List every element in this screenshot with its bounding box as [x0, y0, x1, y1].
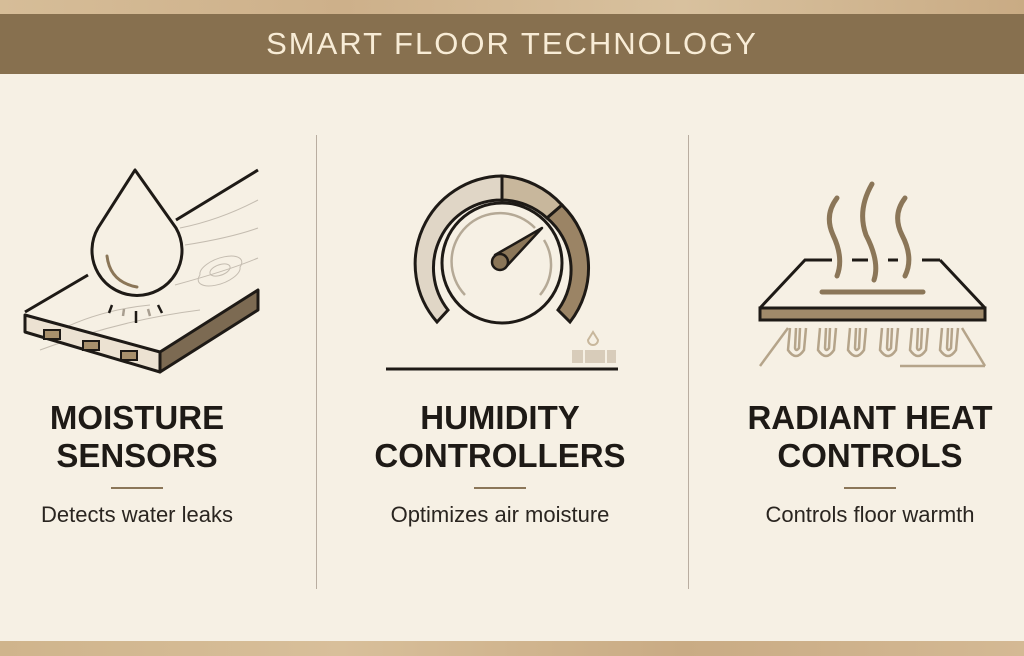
heading: radiant heat controls: CONTROLS	[777, 437, 963, 474]
text: radiant desc: Controls floor warmth	[765, 502, 975, 527]
heading: moisture sensors	[50, 399, 224, 474]
heading: radiant heat controls	[747, 399, 993, 474]
icon: radiant heat	[758, 182, 986, 368]
title	[0, 14, 1024, 74]
heading: moisture sensors: MOISTURE	[50, 399, 224, 436]
icon: humidity gauge	[386, 174, 618, 370]
text: humidity desc: Optimizes air moisture	[391, 502, 609, 527]
heading: moisture sensors: SENSORS	[56, 437, 218, 474]
heading: humidity controllers: CONTROLLERS	[374, 437, 626, 474]
text: moisture desc: Detects water leaks	[41, 502, 233, 527]
icon: moisture plank	[24, 168, 260, 374]
heading: humidity controllers	[374, 399, 626, 474]
wood strip bottom	[0, 641, 1024, 656]
heading: humidity controllers: HUMIDITY	[420, 399, 580, 436]
wood strip top	[0, 0, 1024, 14]
heading: radiant heat controls: RADIANT HEAT	[747, 399, 993, 436]
title: SMART FLOOR TECHNOLOGY	[266, 26, 758, 61]
